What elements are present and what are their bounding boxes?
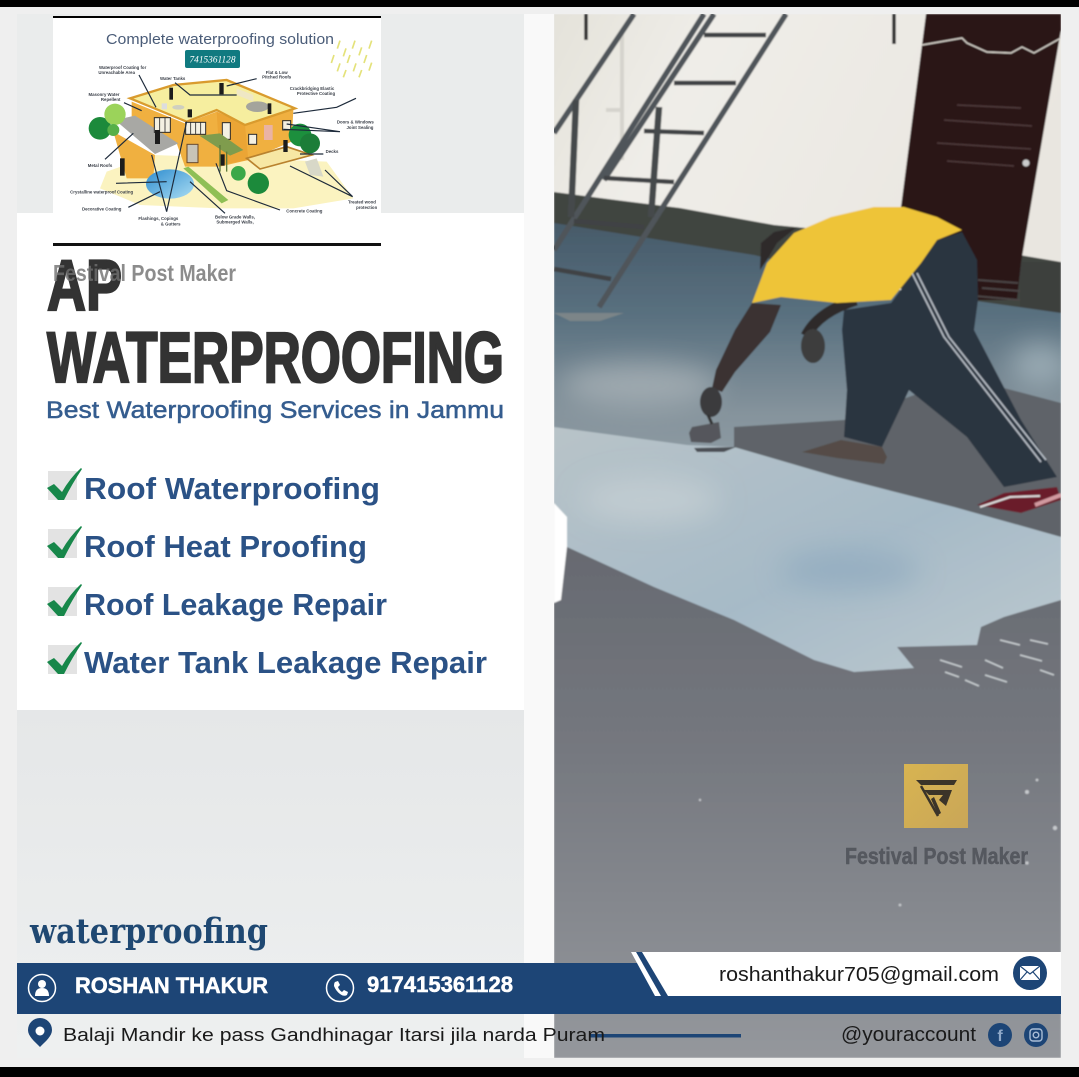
upper floor: [554, 222, 1061, 448]
callout labels: Flashings, Copings: [138, 216, 179, 221]
roof tank: [246, 101, 269, 112]
address line rule: [590, 1034, 741, 1038]
callout labels: Crackbridging Elastic: [290, 86, 335, 91]
blue slash: [636, 952, 668, 996]
brush: [689, 422, 721, 443]
callout labels: Metal Roofs: [88, 163, 113, 168]
panel: left column: [17, 14, 524, 1058]
phone badge: [185, 50, 240, 68]
wire: [922, 38, 1061, 53]
icon: phone: [326, 974, 354, 1002]
white bucket: [554, 503, 567, 603]
service list: [47, 468, 487, 680]
heading: AP: AP: [47, 247, 122, 326]
pergola: [199, 133, 243, 156]
callout labels: Waterproof Coating for: [99, 65, 147, 70]
bottom black bar: [0, 1067, 1079, 1077]
top black bar: [0, 0, 1079, 7]
pool: [146, 169, 194, 199]
name: ROSHAN THAKUR: [75, 973, 268, 998]
windows: [154, 118, 291, 163]
workers: [120, 83, 288, 176]
white gutter: [524, 14, 554, 1058]
photo scene: [554, 14, 1070, 1058]
icon: envelope: [1013, 956, 1047, 990]
callout labels: Protective Coating: [297, 91, 335, 96]
callout labels: Crystalline waterproof Coating: [70, 189, 134, 194]
callout labels: Repellent: [101, 97, 121, 102]
item: roof leakage repair: Roof Leakage Repair: [84, 587, 387, 622]
callout labels: Concrete Coating: [286, 208, 323, 213]
callout labels: Decorative Coating: [82, 206, 122, 211]
illustration: waterproofing house diagram: [53, 17, 381, 226]
wall brackets: [586, 14, 894, 44]
deck: [247, 147, 312, 169]
leader lines: [105, 75, 356, 213]
callout labels: Masonry Water: [89, 92, 120, 97]
social handle: @youraccount: [841, 1024, 976, 1046]
shaded unpainted floor: [734, 387, 1061, 537]
wall base band: [554, 192, 1061, 320]
door: [901, 14, 1061, 300]
callout labels: Submerged Walls,: [216, 219, 254, 224]
white email panel: [642, 952, 1061, 996]
social row: [841, 1023, 1048, 1047]
item: roof heat proofing: Roof Heat Proofing: [84, 529, 367, 564]
light floor sheen: [560, 363, 720, 407]
rule below illustration: [53, 243, 381, 246]
callout labels: Decks: [326, 149, 339, 154]
icon: instagram: [1024, 1023, 1048, 1047]
callout labels: Flat & Low: [266, 70, 288, 75]
white slash: [631, 952, 661, 996]
left terrace: [115, 116, 178, 154]
callout labels: Joint Sealing: [347, 125, 374, 130]
rain dashes: [331, 41, 372, 77]
paint tint patches: [580, 478, 920, 590]
worker: [689, 207, 1061, 513]
address: Balaji Mandir ke pass Gandhinagar Itarsi jila narda Puram: [63, 1024, 605, 1045]
back foot: [977, 487, 1061, 513]
icon: location pin: [28, 1018, 52, 1047]
item: water tank leakage repair: Water Tank Leakage Repair: [84, 645, 487, 680]
planter strip: [183, 167, 228, 203]
rule above illustration: [53, 16, 381, 18]
pale ground: [100, 155, 353, 208]
contact band: [17, 952, 1061, 1014]
house group: [89, 80, 353, 208]
lower floor: [554, 530, 1061, 1058]
paint flecks: [940, 640, 1054, 686]
subtitle: Best Waterproofing Services in Jammu: [46, 397, 504, 424]
house drawing: [70, 41, 378, 226]
icon: facebook: [988, 1023, 1012, 1047]
front foot: [802, 440, 887, 464]
roof: [130, 80, 295, 125]
callout labels: Water Tanks: [160, 76, 186, 81]
trees: [89, 104, 320, 194]
email: roshanthakur705@gmail.com: [719, 964, 999, 986]
phone number: 917415361128: [367, 972, 513, 997]
callout labels: Doors & Windows: [337, 120, 374, 125]
phone badge: 7415361128: [190, 54, 236, 64]
floor specks: [699, 779, 1057, 906]
logo: gold square: [904, 764, 968, 828]
item: roof waterproofing: Roof Waterproofing: [84, 471, 380, 506]
callout labels: Treated wood: [348, 200, 376, 205]
steps: [305, 158, 323, 177]
label: waterproofing: waterproofing: [29, 911, 268, 952]
watermark: Festival Post Maker: [845, 843, 1028, 869]
callout labels: protection: [356, 205, 378, 210]
icon: facebook: f: [997, 1028, 1003, 1045]
callout labels: Below Grade Walls,: [215, 214, 255, 219]
far arm: [806, 300, 856, 336]
freshly painted area: [554, 427, 1061, 672]
near arm: [712, 303, 781, 392]
address row: [28, 1018, 741, 1047]
callout labels: Pitched Roofs: [262, 75, 292, 80]
callout labels: [70, 65, 378, 226]
watermark: festival post maker: Festival Post Maker: [53, 260, 236, 286]
panel: worker photo: [554, 14, 1070, 1058]
ladder: [554, 14, 786, 307]
head: [760, 227, 797, 270]
trousers: [842, 232, 1057, 487]
icon: person: [28, 974, 56, 1002]
chimney: [264, 125, 273, 140]
illustration title: Complete waterproofing solution: [106, 32, 334, 48]
callout labels: Unreachable Area: [98, 70, 136, 75]
yellow shirt: [752, 207, 962, 303]
heading: waterproofing: WATERPROOFING: [47, 319, 504, 398]
callout labels: & Gutters: [161, 221, 181, 226]
walls: [132, 102, 293, 167]
